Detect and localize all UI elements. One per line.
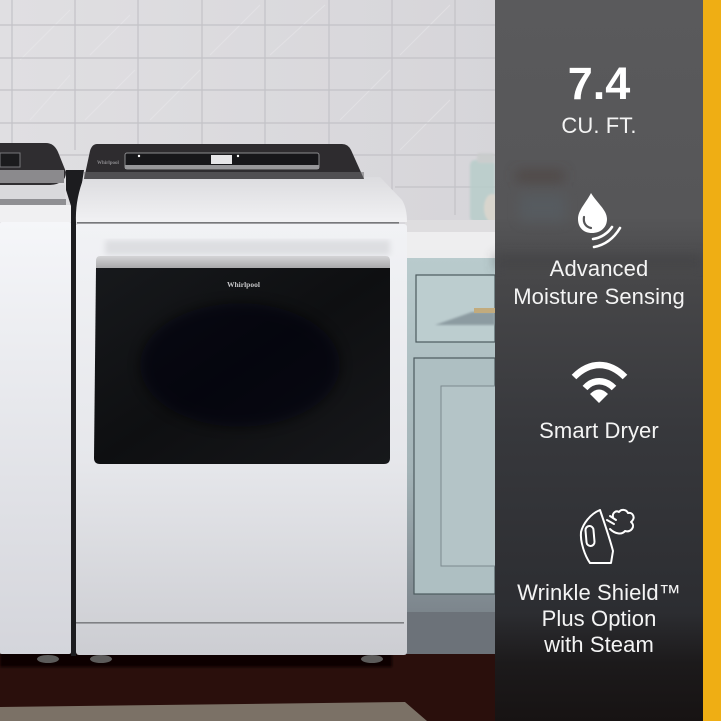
dryer console (84, 144, 364, 179)
dark panel (495, 0, 703, 721)
control panel (125, 153, 319, 169)
dryer lid (76, 177, 407, 222)
capacity unit: CU. FT. (561, 113, 637, 138)
door handle strip (96, 256, 390, 268)
left washer (0, 143, 71, 654)
capacity figure: 7.4 (568, 58, 630, 109)
jar on counter (470, 153, 500, 222)
floor (0, 650, 495, 721)
blurred panel reflections (495, 170, 703, 267)
feature label: wrinkle shield: Plus Option (542, 606, 656, 631)
tile wall (0, 0, 500, 225)
feature label: moisture sensing: Advanced (550, 256, 648, 281)
dryer body (76, 224, 407, 655)
icon: water drop (578, 193, 620, 247)
rug (0, 702, 427, 721)
feature label: moisture sensing (513, 256, 685, 309)
door reflection (140, 303, 340, 427)
feature label: wrinkle shield (517, 580, 681, 657)
dryer (76, 144, 407, 655)
console logo: Whirlpool (97, 161, 120, 166)
icon: steam iron (581, 510, 634, 563)
dryer feet (37, 655, 383, 663)
feature label: wrinkle shield: Wrinkle Shield™ (517, 580, 681, 605)
base seam (76, 622, 404, 624)
dryer door (94, 268, 390, 464)
cabinet (405, 258, 501, 656)
icon: wifi (574, 365, 625, 403)
countertop (405, 220, 495, 258)
door logo: Whirlpool (227, 280, 260, 289)
yellow stripe (703, 0, 721, 721)
gap between appliances (66, 170, 84, 656)
door recess shadow (105, 240, 390, 255)
feature label: wrinkle shield: with Steam (544, 632, 654, 657)
display (211, 155, 232, 164)
feature label: moisture sensing: Moisture Sensing (513, 284, 685, 309)
feature label: smart dryer: Smart Dryer (539, 418, 659, 443)
